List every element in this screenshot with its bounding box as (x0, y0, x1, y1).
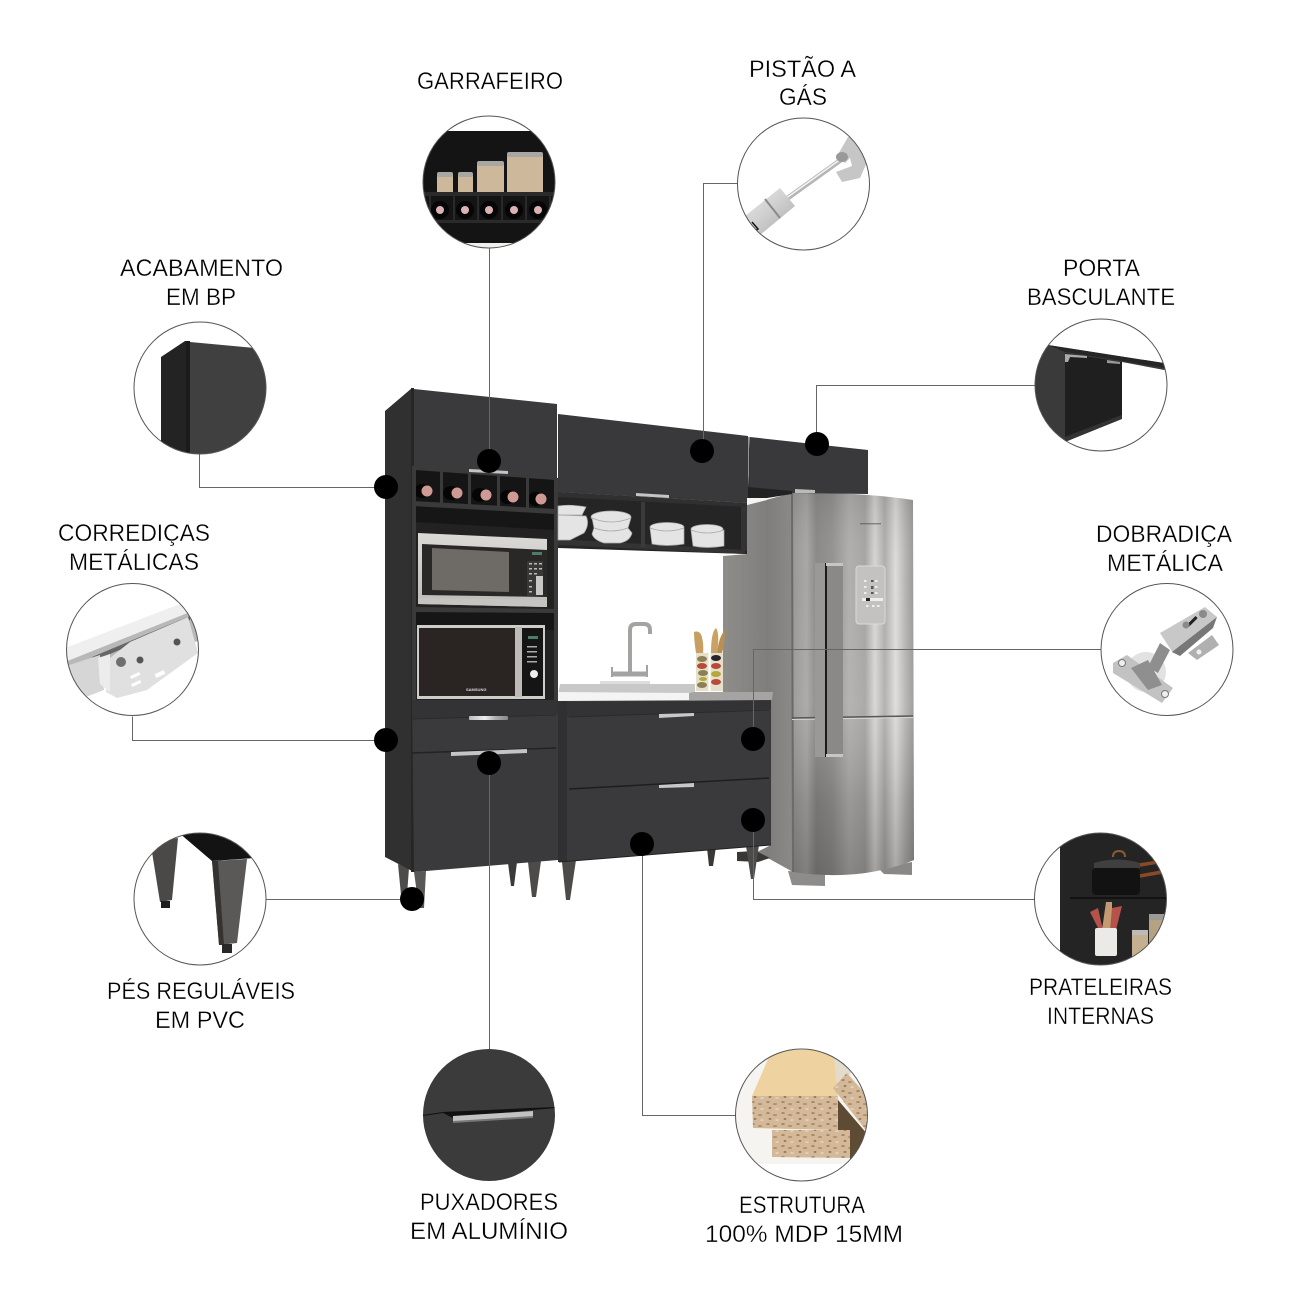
label (410, 1189, 568, 1245)
label (1027, 255, 1175, 311)
base cabinet (558, 700, 771, 862)
marker dots (374, 432, 829, 911)
refrigerator (723, 493, 914, 886)
label: DOBRADIÇA (1096, 521, 1232, 548)
callout: puxadores em alumínio (410, 1049, 568, 1245)
open bays (414, 466, 558, 702)
detail photo: gas piston (730, 118, 870, 250)
callout: pistão a gás (730, 56, 870, 250)
detail photo: lift-up door (1030, 319, 1170, 455)
label: EM ALUMÍNIO (410, 1218, 568, 1245)
label: PRATELEIRAS (1029, 974, 1172, 1001)
microwave lower: SAMSUNG (466, 687, 486, 692)
label: EM PVC (155, 1007, 245, 1034)
detail photo: hinge (1101, 584, 1233, 716)
callout: pés reguláveis em PVC (107, 832, 295, 1034)
callout: corrediças metálicas (58, 520, 210, 716)
top door (414, 389, 557, 479)
label: METÁLICA (1107, 550, 1223, 577)
top handle (469, 469, 508, 474)
label: GÁS (779, 84, 827, 111)
microwave lower (417, 625, 545, 699)
legs (398, 845, 759, 908)
callout: dobradiça metálica (1096, 521, 1233, 716)
label (705, 1192, 903, 1248)
label: PUXADORES (420, 1189, 558, 1216)
right door (748, 437, 868, 497)
utensil jar (694, 628, 725, 691)
middle door (558, 414, 748, 503)
label: CORREDIÇAS (58, 520, 210, 547)
shelf handle (636, 493, 669, 498)
faucet (611, 624, 650, 677)
label: PISTÃO A (749, 56, 856, 83)
label: PÉS REGULÁVEIS (107, 978, 295, 1005)
sink and counter (558, 624, 773, 702)
callout: prateleiras internas (1029, 830, 1172, 1030)
tall cabinet (385, 388, 558, 872)
label: BASCULANTE (1027, 284, 1175, 311)
microwave upper (418, 533, 547, 607)
label (749, 56, 856, 111)
callout: acabamento em BP (120, 255, 283, 456)
detail photo: panel finish (134, 322, 270, 456)
upper wall cabinets (558, 414, 868, 554)
label (120, 255, 283, 311)
detail photo: adjustable legs (134, 832, 266, 965)
callout: estrutura 100% MDP 15mm (705, 1049, 903, 1248)
label: GARRAFEIRO (417, 68, 563, 95)
fridge display panel (856, 566, 885, 624)
kitchen illustration (385, 388, 914, 908)
detail photo: particle board (735, 1049, 869, 1181)
drawer lines (569, 710, 769, 717)
detail photo: wine rack (423, 116, 555, 249)
label: METÁLICAS (69, 549, 199, 576)
callout: porta basculante (1027, 255, 1175, 455)
label: 100% MDP 15MM (705, 1221, 903, 1248)
label (1029, 974, 1172, 1030)
leader lines (132, 184, 1100, 1116)
open shelf (558, 492, 747, 554)
label: ACABAMENTO (120, 255, 283, 282)
detail photo: aluminium handle (423, 1049, 556, 1181)
callout: garrafeiro (417, 68, 563, 249)
wine rack (412, 465, 555, 706)
label: PORTA (1063, 255, 1140, 282)
label: INTERNAS (1047, 1003, 1154, 1030)
label (58, 520, 210, 576)
lower drawer and door (412, 700, 558, 872)
fridge handles (815, 563, 843, 757)
label: ESTRUTURA (739, 1192, 865, 1219)
detail photo: drawer slide (60, 584, 200, 716)
label (107, 978, 295, 1034)
stacked plates (558, 505, 724, 548)
label (1096, 521, 1232, 577)
label: EM BP (166, 284, 236, 311)
detail photo: inner shelves (1034, 830, 1170, 970)
